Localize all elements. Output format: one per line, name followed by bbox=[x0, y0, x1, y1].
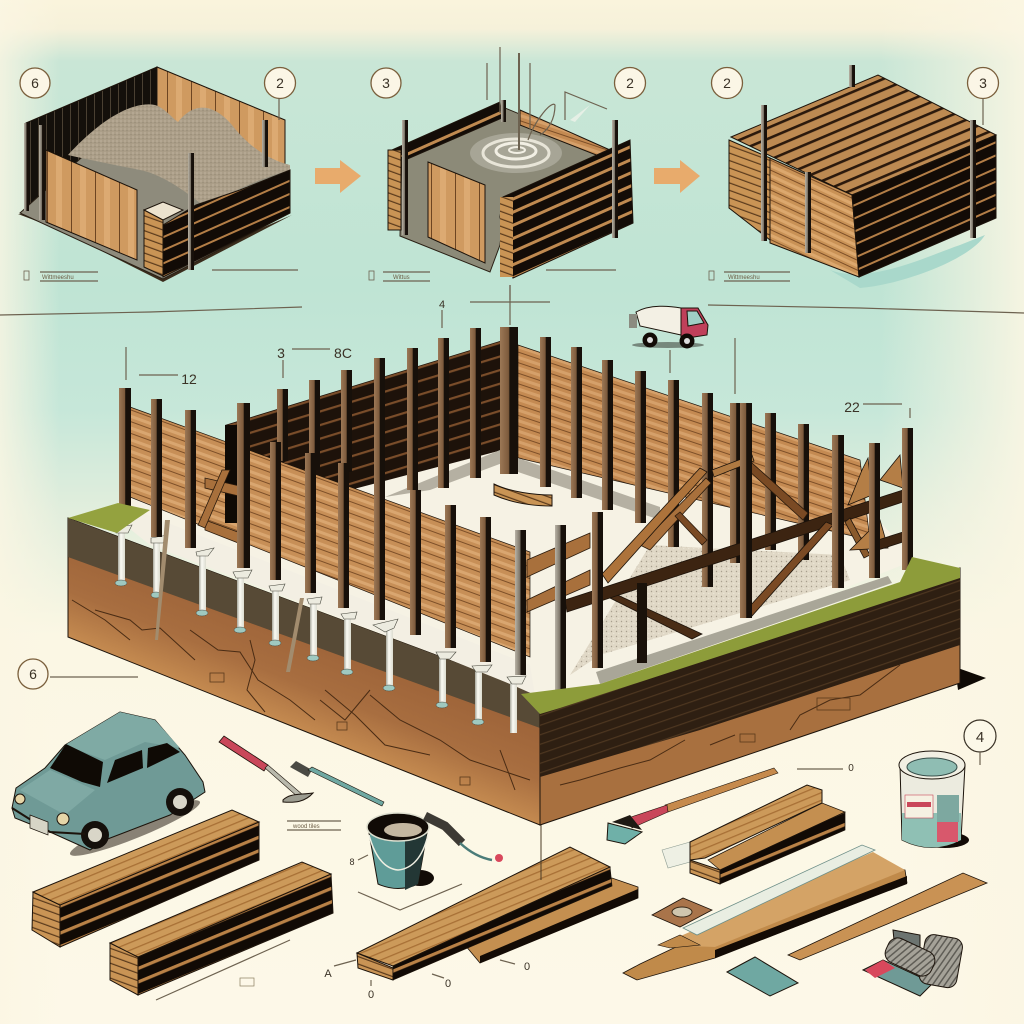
main diagram callouts bbox=[18, 285, 910, 689]
back-left dark wall bbox=[26, 67, 157, 212]
ground cracks right bbox=[560, 665, 900, 785]
left stacked ends bbox=[729, 140, 770, 240]
pin bases bbox=[115, 580, 484, 725]
label 0 bbox=[797, 763, 854, 774]
ground base bbox=[20, 150, 290, 279]
left log ends bbox=[388, 150, 401, 230]
number marker right bbox=[264, 68, 296, 120]
pin caps bbox=[116, 525, 526, 684]
left plank face bbox=[770, 158, 859, 277]
centre pile labels bbox=[324, 960, 530, 1001]
right log wall bbox=[500, 140, 633, 278]
right cross braces behind bbox=[527, 463, 808, 612]
number marker 6: 6 bbox=[29, 666, 37, 682]
back wall grey footing bbox=[518, 458, 660, 520]
white gravel edge bbox=[125, 512, 535, 695]
axe bbox=[607, 768, 778, 844]
callout 22 bbox=[844, 399, 910, 418]
divider line right bbox=[708, 305, 1024, 313]
corner block bbox=[144, 202, 183, 276]
number marker left bbox=[371, 68, 401, 98]
teal car bbox=[12, 712, 205, 863]
back-right wood wall bbox=[157, 67, 285, 180]
car hood bbox=[20, 770, 95, 815]
white foot pins bbox=[118, 530, 517, 733]
right grass band bbox=[521, 557, 960, 714]
number marker right: 3 bbox=[979, 75, 987, 91]
paint can with marker 4 bbox=[899, 720, 996, 848]
arrow: step 1 to 2 bbox=[315, 160, 361, 193]
number marker left bbox=[20, 68, 50, 98]
callout ticks right bbox=[670, 338, 735, 394]
number marker right bbox=[968, 68, 998, 125]
caption: Wittmeeshu bbox=[42, 275, 74, 281]
caption bbox=[24, 270, 298, 281]
caption tag: wood tiles bbox=[292, 824, 320, 830]
single long plank bbox=[788, 873, 987, 960]
headlights and bumper bbox=[12, 794, 85, 835]
centre pile labels: 0 bbox=[368, 989, 374, 1001]
hose bbox=[425, 816, 503, 862]
cracks in soil bbox=[72, 600, 530, 790]
dark earth layers right bbox=[540, 568, 960, 777]
number marker 6 bbox=[18, 659, 138, 689]
callout 12 bbox=[126, 347, 197, 387]
door panel bbox=[428, 162, 485, 263]
lower brace bbox=[606, 592, 702, 639]
car roof bbox=[65, 712, 180, 760]
stray tools on soil bbox=[155, 520, 304, 672]
small delivery truck bbox=[629, 306, 708, 348]
lumber stack 1 bbox=[32, 810, 259, 947]
callout top centre bbox=[439, 285, 550, 328]
bucket with sand bbox=[349, 813, 503, 910]
concrete floor bbox=[400, 108, 612, 272]
front post row bbox=[119, 388, 491, 662]
dirt base bbox=[18, 214, 292, 282]
bucket callout: 8 bbox=[349, 857, 355, 867]
main truss bbox=[565, 455, 903, 639]
panel: step 3 finished timber form bbox=[709, 65, 998, 288]
front-left wood wall bbox=[130, 407, 530, 657]
top cap bbox=[712, 455, 754, 477]
back-left log wall bbox=[392, 102, 502, 160]
left grass patch bbox=[68, 503, 150, 533]
wheels bbox=[81, 788, 194, 849]
label 0: 0 bbox=[848, 763, 854, 774]
back post row bbox=[277, 327, 809, 587]
sand ground bbox=[118, 430, 915, 692]
plank ends bbox=[357, 953, 393, 980]
right log face bbox=[852, 135, 996, 277]
front plank wall bbox=[46, 150, 137, 260]
water stain bbox=[830, 235, 985, 288]
back-right wood wall bbox=[518, 345, 870, 540]
back-left dark wall bbox=[225, 338, 510, 490]
sand mound bbox=[68, 104, 290, 207]
lower rail bbox=[878, 532, 903, 550]
lumber stack 2 bbox=[110, 862, 333, 995]
small lumber label bbox=[156, 940, 290, 1000]
centre lumber pile bbox=[357, 825, 638, 980]
centre pile labels: 0 bbox=[524, 961, 530, 973]
plank stack right bbox=[662, 785, 845, 884]
number marker right: 2 bbox=[276, 75, 284, 91]
marker 4: 4 bbox=[976, 729, 984, 746]
centre pile labels: 0 bbox=[445, 978, 451, 990]
top board bbox=[357, 847, 610, 966]
soil right face bbox=[540, 568, 960, 825]
right x brace bbox=[845, 518, 870, 558]
centre pile labels: A bbox=[324, 968, 332, 980]
pour lines bbox=[487, 47, 607, 150]
number marker left: 2 bbox=[723, 75, 731, 91]
callout 3: 3 bbox=[277, 345, 285, 361]
long diagonal brace bbox=[602, 468, 707, 583]
right timber frame bbox=[848, 455, 903, 550]
caption: Wittus bbox=[393, 275, 410, 281]
gravel floor bbox=[570, 545, 850, 675]
long boards with ruler bbox=[623, 845, 907, 980]
hammer bbox=[219, 736, 313, 802]
side layers bbox=[393, 867, 612, 980]
callout 12: 12 bbox=[181, 371, 197, 387]
callout 3: 8C bbox=[334, 345, 352, 361]
wall gap bbox=[225, 425, 243, 523]
side windows bbox=[107, 743, 180, 783]
caption bbox=[369, 270, 616, 300]
posts bbox=[402, 100, 618, 238]
windshield bbox=[50, 744, 103, 787]
number marker left: 3 bbox=[382, 75, 390, 91]
right log wall bbox=[163, 170, 290, 277]
soil left face bbox=[68, 518, 540, 825]
top log surface bbox=[731, 75, 996, 195]
ground shadow bbox=[955, 667, 986, 690]
main foundation model bbox=[68, 327, 986, 825]
under brace bbox=[750, 522, 833, 616]
panel: step 1 sand-filled box bbox=[18, 67, 298, 282]
plank end stack bbox=[500, 197, 513, 277]
bucket callout bbox=[349, 855, 462, 910]
long beam bbox=[565, 490, 903, 612]
left brace bbox=[198, 470, 246, 546]
dark topsoil band left bbox=[68, 518, 540, 728]
brown tag bbox=[652, 898, 712, 927]
back-left grey footing bbox=[385, 448, 505, 497]
caption tag bbox=[287, 821, 341, 830]
teal card bbox=[727, 957, 798, 996]
rolls and kit bbox=[863, 930, 964, 996]
number marker left bbox=[712, 68, 742, 98]
posts bbox=[761, 65, 976, 253]
caption: Wittmeeshu bbox=[728, 275, 760, 281]
pry bar bbox=[290, 761, 384, 806]
front right posts bbox=[515, 403, 913, 690]
lower plank bbox=[465, 878, 638, 963]
callout 22: 22 bbox=[844, 399, 860, 415]
center arc plank bbox=[494, 484, 552, 506]
soil tags bbox=[210, 673, 850, 785]
number marker left: 6 bbox=[31, 75, 39, 91]
back-right plank wall bbox=[520, 110, 610, 158]
posts bbox=[24, 120, 268, 270]
divider line left bbox=[0, 307, 302, 315]
panel: step 2 pouring concrete bbox=[369, 47, 646, 300]
caption bbox=[709, 271, 790, 281]
arrow: step 2 to 3 bbox=[654, 160, 700, 193]
ripples in wet concrete bbox=[470, 133, 562, 173]
callout top centre: 4 bbox=[439, 299, 445, 311]
number marker right: 2 bbox=[626, 75, 634, 91]
number marker right bbox=[614, 68, 646, 98]
concrete strip bbox=[596, 576, 892, 684]
callout 3 bbox=[277, 345, 352, 378]
